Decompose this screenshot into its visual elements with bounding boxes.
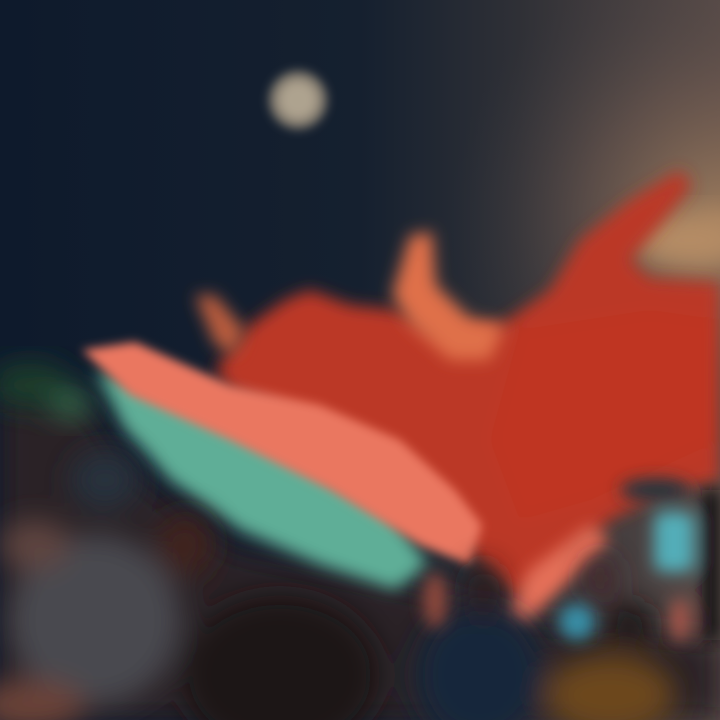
moon — [269, 71, 327, 129]
dragon: teal belly — [95, 370, 428, 590]
crowd silhouettes — [0, 450, 675, 720]
crowd: raised phones and hands — [423, 478, 720, 642]
dragon: salmon underside — [82, 342, 482, 565]
foliage at left edge — [0, 363, 92, 419]
dragon: orange spikes and crest — [195, 232, 610, 625]
crowd base — [0, 400, 720, 720]
dragon: red body and wings — [215, 170, 720, 600]
